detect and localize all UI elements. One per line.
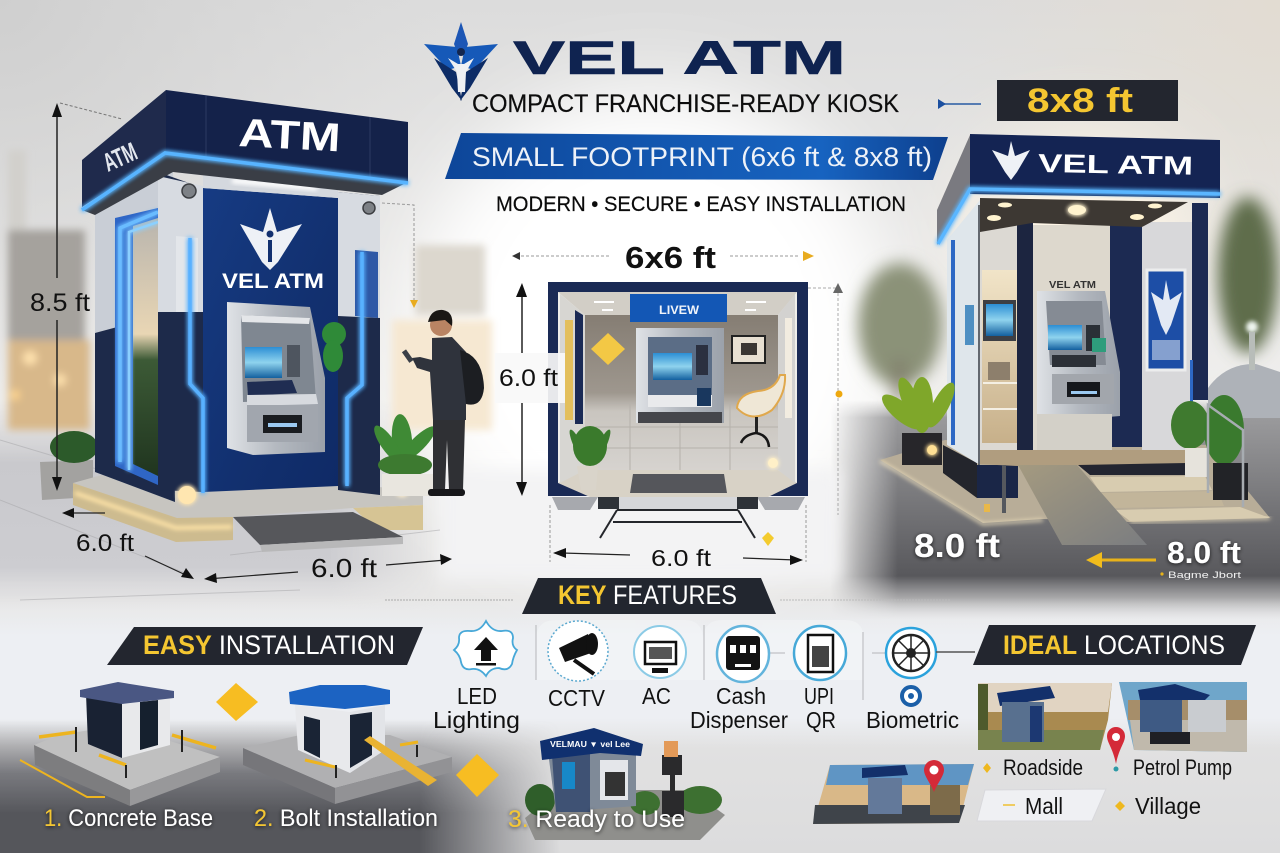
tagline: MODERN • SECURE • EASY INSTALLATION [496,193,906,216]
subtitle: COMPACT FRANCHISE-READY KIOSK [472,90,899,118]
dimension 8.0 right with arrow: 8.0 ft [1167,535,1241,570]
diamond marker [591,333,625,365]
kiosk roof [82,90,408,215]
title: VEL ATM [513,31,846,84]
car [1208,364,1280,418]
planter left [40,431,98,500]
key features heading: KEY FEATURES [558,580,737,610]
ideal locations heading: IDEAL LOCATIONS [1003,630,1225,660]
brand logo [424,22,498,101]
location tile: mall [977,789,1106,821]
size badge 8x8 [997,80,1178,121]
sign header [630,294,727,322]
width dimensions: 6.0 ft [311,553,378,583]
kiosk blue front panel [203,188,338,492]
ramp [1018,465,1147,545]
key features heading [385,578,950,614]
chair [737,375,785,447]
location photo: petrol pump [1119,682,1247,752]
easy installation heading: EASY INSTALLATION [143,630,395,660]
logo and name on kiosk [222,208,324,293]
plinth [943,445,1210,498]
plant left of kiosk [877,375,960,465]
right kiosk 8x8 [877,134,1270,580]
interior pillars and walls [1017,203,1208,450]
location label: village: Village [1135,793,1201,819]
6.0 height dimension [495,283,565,496]
step 1 concrete base [20,682,220,832]
kiosk glass door [115,208,158,485]
width dimensions: 6.0 ft [76,530,134,557]
step 3 ready to use [508,728,725,840]
logo and name on kiosk: VEL ATM [222,270,324,293]
feature: CCTV: CCTV [548,685,606,711]
machine [636,328,724,423]
size badge 8x8: 8x8 ft [1027,82,1133,120]
feature: cash dispenser: Dispenser [690,707,788,733]
feature: LED lighting: Lighting [433,707,520,733]
diamond between 1 and 2 [216,683,258,721]
dimension 8.0 right with arrow [1086,535,1242,580]
lit base platform [73,470,423,542]
feature: biometric [866,628,959,733]
roof logo and name [992,141,1193,181]
lamp [768,458,778,468]
feature: LED lighting: LED [457,683,497,709]
kiosk left face [95,172,175,502]
easy installation heading [107,627,423,665]
location pin: petrol pump [1107,727,1125,772]
room shell [548,282,808,496]
person with phone [402,310,484,496]
feature: LED lighting [433,621,520,733]
feature dividers [536,625,890,700]
room stand and threshold [552,497,805,538]
feature: AC: AC [642,683,671,709]
height dimension [30,103,122,491]
kiosk corner column [158,172,203,492]
feature: biometric: Biometric [866,707,959,733]
ideal locations heading [936,625,1256,665]
left kiosk: ATM booth with dimensions: ATM [98,136,142,177]
roof logo and name: VEL ATM [1038,148,1193,181]
step 2 bolt installation: 2. Bolt Installation [254,805,438,832]
location photo: mall [813,764,974,824]
steps [1078,463,1270,521]
ATM sign text: ATM [238,111,342,160]
kiosk soffit lights [203,172,338,198]
6x6 heading: 6x6 ft [625,240,716,275]
step 1 concrete base: 1. Concrete Base [44,805,213,832]
feature: cash dispenser [690,626,788,733]
ramp mat [233,512,403,552]
roof [937,134,1220,245]
base lamps [178,484,408,504]
framed picture [732,336,765,363]
leaf accent on kiosk [322,322,346,372]
feature: cash dispenser: Cash [716,683,766,709]
step 3 ready to use: VELMAU ▼ vel Lee [550,740,631,749]
security cameras [182,184,375,214]
sign header: LIVEW [659,303,700,317]
feature: AC [634,626,686,709]
feature: UPI QR: QR [806,707,836,733]
dimension 8.0 right with arrow: Bagme Jbort [1168,570,1242,580]
base slab [880,440,1270,524]
feature: CCTV [548,621,608,711]
dimension 8.0 left: 8.0 ft [914,527,1000,564]
arrow to size badge [938,99,981,109]
6.0 width dimension [550,505,806,571]
small footprint ribbon: SMALL FOOTPRINT (6x6 ft & 8x8 ft) [472,142,932,172]
step 2 bolt installation [243,685,452,832]
poster [1147,270,1185,370]
6.0 width dimension: 6.0 ft [651,545,712,571]
ceiling lights [594,301,766,311]
step 3 ready to use: 3. Ready to Use [508,806,685,833]
bollard [984,465,1006,513]
center room 6x6 [495,240,843,571]
feature: UPI QR: UPI [804,683,834,709]
location label: petrol pump: Petrol Pump [1133,755,1232,780]
right guide [808,283,843,515]
ATM machine [227,302,325,455]
neon strips [190,238,362,493]
ceiling and lights [980,198,1188,232]
left glass wall [947,200,980,465]
plant right [370,413,440,496]
feature panels [536,620,864,680]
left kiosk: ATM booth with dimensions [30,90,484,583]
6.0 height dimension: 6.0 ft [499,365,558,392]
dashed guide with yellow arrow [382,203,418,308]
width dimensions [62,508,452,583]
small footprint ribbon [445,133,948,180]
machine label: VEL ATM [1049,280,1096,291]
plant [567,426,613,490]
location pin: mall [924,760,944,792]
machine [1037,291,1120,450]
feature: UPI QR [794,626,846,733]
location tile: mall: Mall [1025,793,1063,819]
width guide [512,251,814,261]
plant right of kiosk [1171,395,1248,500]
location label: roadside: Roadside [1003,755,1083,780]
location photo: roadside [978,683,1112,750]
height dimension: 8.5 ft [30,289,90,317]
asphalt right [830,400,1280,620]
handrail [1208,405,1243,507]
kiosk right column [338,192,380,495]
room right wall details [778,294,795,483]
diamond between 2 and 3 [456,754,499,797]
room left wall details [560,294,585,483]
floor mat [630,474,727,493]
shop window [980,225,1018,450]
